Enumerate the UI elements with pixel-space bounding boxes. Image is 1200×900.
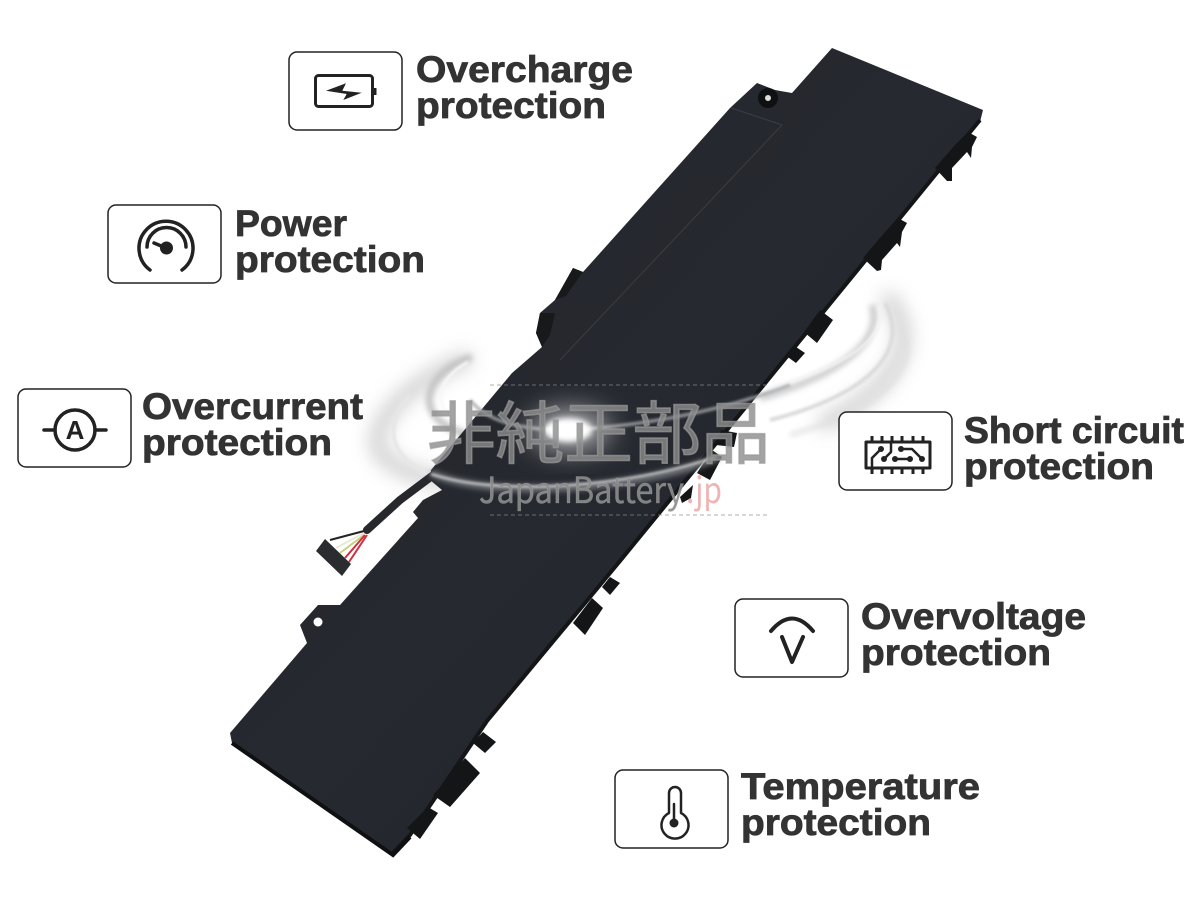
label: protection bbox=[235, 239, 425, 280]
watermark dashed lines bbox=[490, 385, 767, 515]
label: Overcharge bbox=[416, 49, 633, 90]
label: Power bbox=[235, 203, 347, 244]
icon: battery with bolt bbox=[289, 52, 402, 130]
icon: ammeter: A bbox=[66, 415, 85, 445]
icon: gauge bbox=[108, 205, 221, 283]
bottom edge bbox=[232, 743, 410, 855]
label: Temperature bbox=[741, 766, 980, 807]
side clips bbox=[407, 132, 977, 839]
cable bbox=[316, 470, 440, 576]
label: protection bbox=[142, 422, 332, 463]
label: protection bbox=[741, 802, 931, 843]
watermark bbox=[427, 385, 770, 515]
icon: thermometer bbox=[615, 770, 728, 848]
watermark domain suffix: .jp bbox=[686, 462, 722, 514]
battery body bbox=[230, 48, 983, 855]
icon: circuit chip bbox=[839, 412, 952, 490]
swirl: front arcs over battery bbox=[431, 385, 790, 489]
feature: overcharge protection bbox=[289, 49, 633, 130]
feature: power protection bbox=[108, 203, 425, 283]
feature: overcurrent protection bbox=[18, 386, 363, 467]
battery seam bbox=[560, 108, 782, 360]
feature: overvoltage protection bbox=[735, 596, 1086, 677]
connector bbox=[316, 539, 351, 576]
label: Overvoltage bbox=[861, 596, 1086, 637]
watermark site name: JapanBattery bbox=[479, 462, 684, 514]
upper left latch block bbox=[536, 268, 583, 347]
mounting eyelet bbox=[758, 88, 778, 108]
label: Overcurrent bbox=[142, 386, 363, 427]
swirl: rear glow behind battery bbox=[378, 295, 906, 486]
label: protection bbox=[861, 632, 1051, 673]
icon: voltage arc bbox=[735, 599, 848, 677]
right edge wall bbox=[393, 120, 980, 853]
battery bbox=[230, 48, 983, 855]
feature: temperature protection bbox=[615, 766, 980, 848]
label: protection bbox=[964, 446, 1154, 487]
mounting ear hole bbox=[314, 618, 322, 626]
watermark kanji: 非純正部品 bbox=[427, 397, 770, 473]
feature: short circuit protection bbox=[839, 410, 1184, 490]
label: protection bbox=[416, 85, 606, 126]
icon: ammeter bbox=[18, 389, 131, 467]
label: Short circuit bbox=[964, 410, 1184, 451]
